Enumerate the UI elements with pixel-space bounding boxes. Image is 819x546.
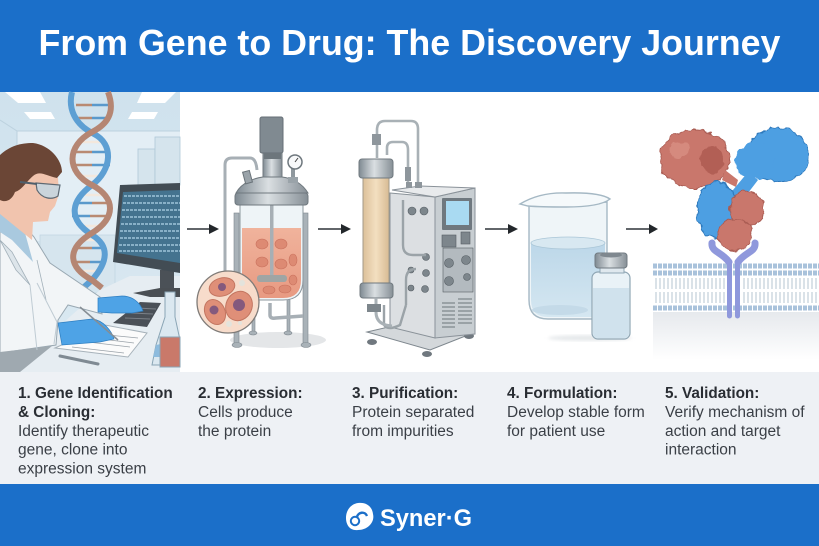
arrow: step 4 to 5 (626, 224, 658, 234)
text: step 3 caption: 3. Purification: (352, 385, 458, 402)
text: step 1 caption: & Cloning: (18, 404, 95, 421)
machine top (392, 186, 475, 197)
desk (8, 276, 180, 372)
background cabinets (138, 137, 180, 185)
receptor (712, 243, 755, 316)
text: step 2 caption: Cells produce (198, 404, 293, 421)
pressure gauge (288, 155, 302, 183)
floor shadow (230, 332, 326, 348)
machine left face (390, 193, 435, 338)
arrow: step 1 to 2 (187, 224, 219, 234)
column tube (363, 178, 389, 283)
computer monitor (113, 183, 180, 297)
text: step 5 caption: 5. Validation: (665, 385, 759, 402)
text: step 3 caption: Protein separated (352, 404, 474, 421)
panel: gene identification scene (0, 92, 180, 372)
shaft and impeller (270, 205, 274, 275)
text: step 5 caption: Verify mechanism of (665, 404, 805, 421)
top pipes (377, 121, 418, 183)
vents (442, 299, 472, 327)
internal tubing (384, 200, 426, 328)
antibody: lower blue domain (697, 182, 737, 238)
arrow: step 2 to 3 (318, 224, 351, 234)
controls (408, 207, 473, 292)
caption background (0, 372, 819, 485)
text: step 2 caption: the protein (198, 423, 271, 440)
text: step 2 caption: 2. Expression: (198, 385, 303, 402)
text: step 4 caption: for patient use (507, 423, 605, 440)
text: step 5 caption: interaction (665, 442, 737, 459)
screen (442, 198, 472, 230)
footer band (0, 484, 819, 546)
vial (592, 252, 630, 339)
antibody: salmon domain (660, 130, 730, 188)
inset: magnified cells (197, 271, 259, 333)
cells in liquid (256, 239, 297, 294)
scientist (0, 143, 143, 372)
lid (236, 177, 308, 193)
text: step 1 caption: gene, clone into (18, 442, 127, 459)
icon: DNA helix (71, 92, 111, 288)
panel: cell membrane and antibody (653, 128, 819, 360)
valve (243, 170, 252, 184)
title: From Gene to Drug: The Discovery Journey (39, 23, 781, 63)
text: step 4 caption: 4. Formulation: (507, 385, 617, 402)
antibody: lower salmon domains (718, 191, 764, 251)
machine right face (435, 188, 475, 338)
text: step 3 caption: from impurities (352, 423, 454, 440)
paper and pen (55, 325, 147, 364)
column caps (359, 159, 393, 178)
membrane tails (656, 278, 816, 304)
text: step 1 caption: Identify therapeutic (18, 423, 149, 440)
text: step 1 caption: 1. Gene Identification (18, 385, 173, 402)
culture liquid (242, 228, 301, 298)
legs (232, 213, 311, 348)
membrane heads (653, 266, 819, 308)
text: step 4 caption: Develop stable form (507, 404, 645, 421)
text: step 1 caption: expression system (18, 461, 146, 478)
icon: bioreactor (197, 117, 326, 348)
glass vessel (240, 205, 303, 300)
arrow: step 3 to 4 (485, 224, 518, 234)
icon: beaker and vial (520, 193, 632, 341)
machine base (367, 322, 473, 350)
flask (152, 292, 180, 367)
text: step 5 caption: action and target (665, 423, 781, 440)
icon: purification column and machine (359, 121, 475, 357)
ceiling lights (5, 92, 176, 119)
logo (346, 503, 472, 532)
header band (0, 0, 819, 92)
logo: Syner·G (380, 505, 472, 532)
antibody: blue domain (735, 128, 809, 182)
keyboard (113, 302, 161, 327)
motor and neck (263, 153, 282, 177)
